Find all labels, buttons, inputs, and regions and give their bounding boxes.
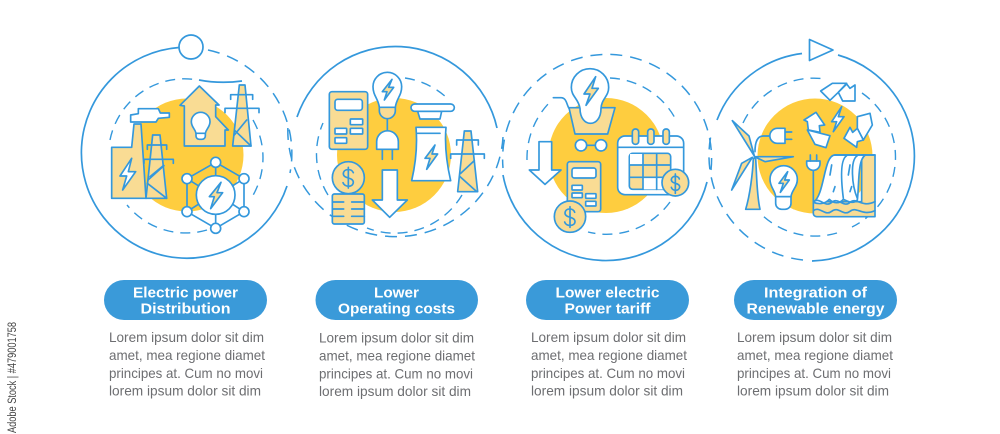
inner dashed ring 3 <box>527 78 675 234</box>
body text 2: Lorem ipsum dolor sit dim <box>319 330 474 346</box>
icon: transmission tower left <box>144 135 173 198</box>
heading pill 4: Renewable energy <box>746 302 884 318</box>
icon: wind turbine, plug and bulb <box>732 121 797 209</box>
body text 1: lorem ipsum dolor sit dim <box>109 382 261 398</box>
inner dashed ring 4 <box>743 78 895 236</box>
body text 3 <box>531 329 687 398</box>
icon: electric meter <box>329 92 368 149</box>
body text 4: amet, mea regione diamet <box>737 347 893 363</box>
icon: down arrow <box>529 142 561 184</box>
panel: electric power distribution <box>81 35 292 258</box>
body text 3: principes at. Cum no movi <box>531 365 685 381</box>
inner dashed ring 2 <box>316 78 462 233</box>
heading pill 3: Power tariff <box>564 302 651 318</box>
icon: transmission tower right <box>225 85 259 146</box>
outer ring 4 <box>709 40 914 261</box>
body text 1: principes at. Cum no movi <box>109 365 263 381</box>
icon: cooling tower <box>412 127 451 181</box>
yellow disc 4 <box>758 98 872 214</box>
icons: grid, factory, house, towers <box>112 85 259 233</box>
heading pill 4 <box>734 280 897 320</box>
yellow disc 2 <box>337 98 451 212</box>
icon: meter with coin <box>554 162 601 232</box>
heading pill 1 <box>104 280 267 320</box>
icon: smoke cloud <box>411 104 454 119</box>
body text 4 <box>737 329 893 398</box>
icon: bulb and plug <box>373 72 402 159</box>
body text 2 <box>319 330 475 399</box>
panel: lower electric power tariff <box>503 54 712 261</box>
body text 2: amet, mea regione diamet <box>319 348 475 364</box>
icon: recycling arrows <box>804 83 872 148</box>
heading pill 2: Lower <box>374 286 419 302</box>
body text 3: lorem ipsum dolor sit dim <box>531 382 683 398</box>
body text 1: amet, mea regione diamet <box>109 347 265 363</box>
icon: house with bulb <box>180 86 228 146</box>
icon: calendar with coin <box>618 129 689 196</box>
body text 4: Lorem ipsum dolor sit dim <box>737 329 892 345</box>
body text 4: principes at. Cum no movi <box>737 365 891 381</box>
icons: cart, calendar, meter <box>529 69 689 232</box>
body text 3: amet, mea regione diamet <box>531 347 687 363</box>
heading pill 3 <box>526 280 689 320</box>
yellow disc 3 <box>548 98 664 213</box>
inner dashed ring 1 <box>110 79 263 233</box>
body text 1 <box>109 329 265 398</box>
body text 2: lorem ipsum dolor sit dim <box>319 383 471 399</box>
icon: factory <box>112 109 169 198</box>
heading pill 4: Integration of <box>764 286 867 302</box>
body text 4: lorem ipsum dolor sit dim <box>737 382 889 398</box>
icon: power grid hub <box>182 157 249 233</box>
heading pill 1: Distribution <box>140 302 230 318</box>
yellow disc 1 <box>130 98 244 212</box>
body text 2: principes at. Cum no movi <box>319 366 473 382</box>
side credit: Adobe Stock | #479001758 <box>7 322 19 433</box>
heading pill 2: Operating costs <box>338 302 455 318</box>
heading pill 2 <box>316 280 478 320</box>
icon: waterfall with plug <box>807 155 875 217</box>
body text 1: Lorem ipsum dolor sit dim <box>109 329 264 345</box>
body text 3: Lorem ipsum dolor sit dim <box>531 329 686 345</box>
heading pill 3: Lower electric <box>556 286 660 302</box>
outer ring 2 <box>288 46 503 237</box>
panel: lower operating costs <box>288 46 503 237</box>
outer ring 3 <box>503 54 712 261</box>
icon: shopping cart with bulb <box>553 69 615 151</box>
icon: transmission tower <box>451 131 484 192</box>
panel: integration of renewable energy <box>709 40 914 261</box>
heading pill 1: Electric power <box>133 286 238 302</box>
icon: down arrow <box>372 170 407 217</box>
outer ring 1 <box>81 35 292 258</box>
icons: meter, plug, coin, plant <box>329 72 484 224</box>
icon: coin stack <box>332 162 364 224</box>
